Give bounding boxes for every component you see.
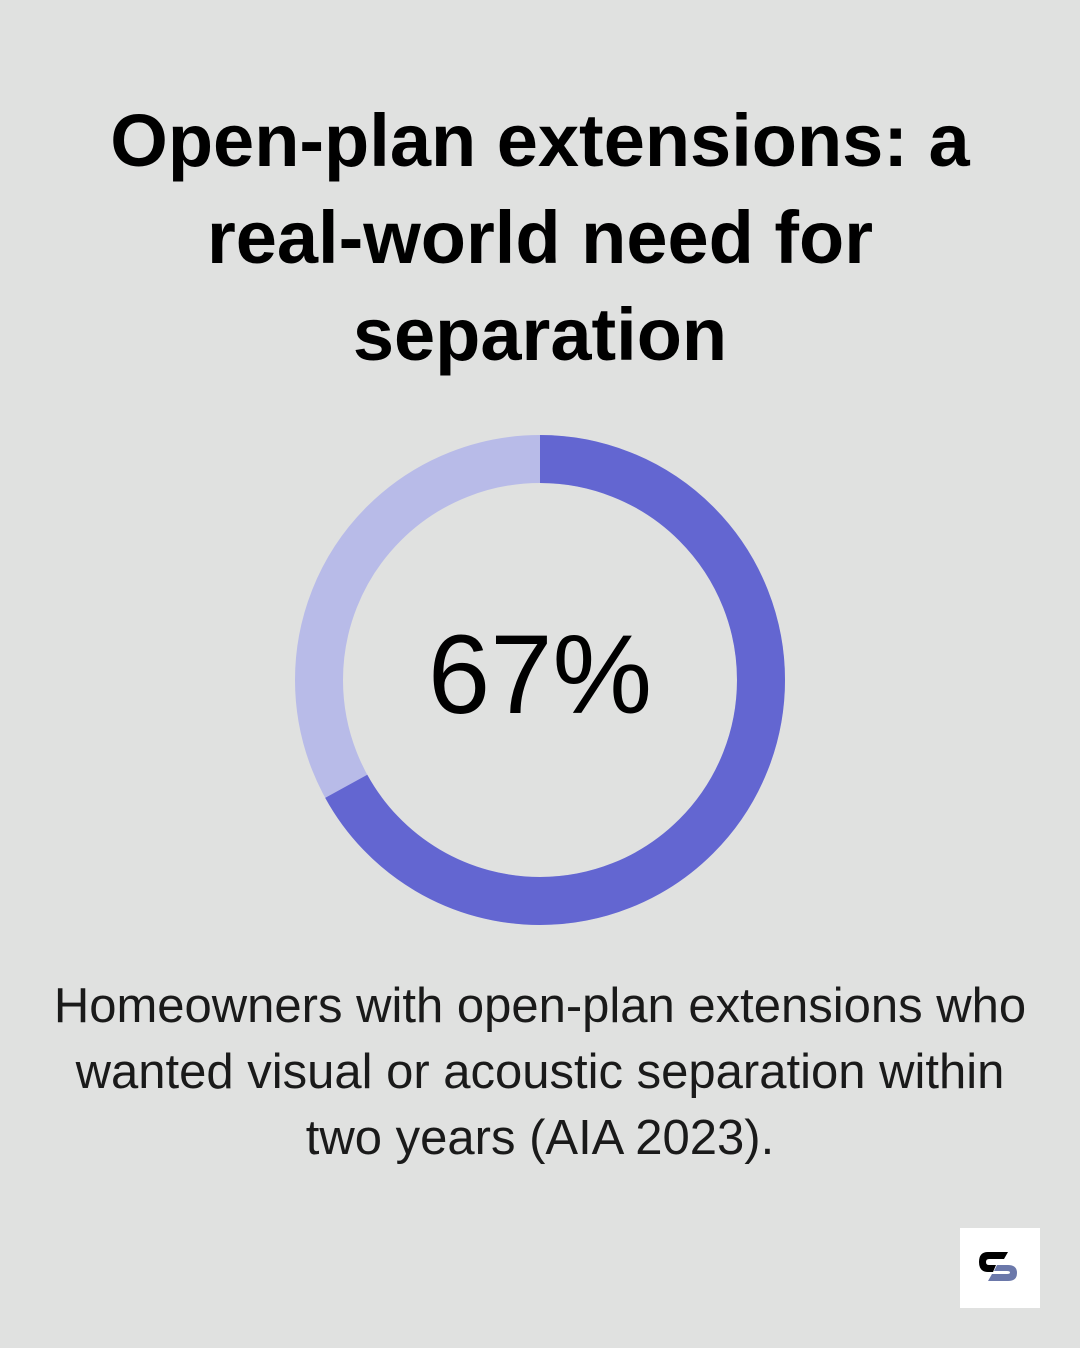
description text: two years (AIA 2023).: [306, 1111, 774, 1165]
title: real-world need for: [207, 196, 873, 279]
donut chart: 67%: [428, 612, 652, 737]
description text: wanted visual or acoustic separation within: [76, 1045, 1004, 1099]
title: separation: [353, 293, 727, 376]
title: Open-plan extensions: a: [110, 99, 970, 182]
logo: [960, 1228, 1040, 1308]
description text: Homeowners with open-plan extensions who: [54, 979, 1026, 1033]
title: [110, 99, 970, 376]
description text: [54, 979, 1026, 1165]
